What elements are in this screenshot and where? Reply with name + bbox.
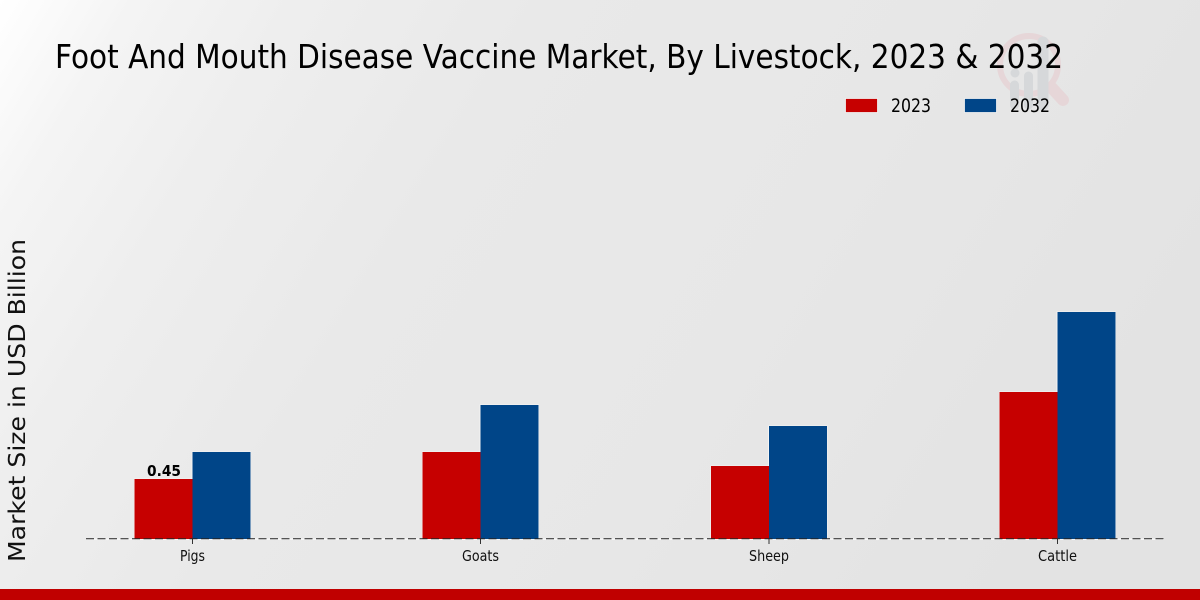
legend: 2023: 2023 [891,95,931,117]
group: Sheep: Sheep [749,547,789,565]
legend: 2023 [846,95,931,117]
baseline [86,538,1164,540]
baseline highlight [86,538,1164,540]
group: Pigs [134,452,250,565]
group: Cattle: Cattle [1038,547,1077,565]
legend: 2032 [964,95,1050,117]
watermark logo [1000,36,1063,105]
group: Goats: Goats [462,547,499,565]
legend: 2032: 2032 [1010,95,1050,117]
bar chart [86,312,1164,565]
group: Cattle [1000,312,1116,565]
group: Sheep [711,426,827,565]
footer bar [0,589,1200,600]
title: Foot And Mouth Disease Vaccine Market, By Livestock, 2023 & 2032 [55,37,1063,76]
group: Goats [422,405,538,565]
group: Pigs: Pigs [180,547,205,565]
y-axis label: Market Size in USD Billion [3,239,31,562]
data label: 0.45 [147,462,181,480]
legend [846,95,1050,117]
